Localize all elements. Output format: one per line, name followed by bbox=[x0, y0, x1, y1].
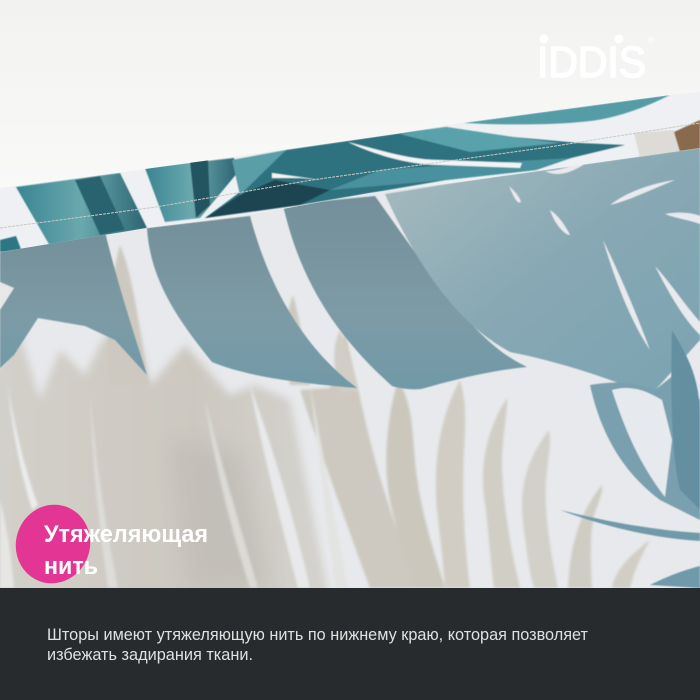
white leaf gaps bbox=[509, 160, 700, 350]
heading: Утяжеляющая нить: Утяжеляющая bbox=[44, 521, 208, 548]
blue palm leaves bbox=[0, 148, 700, 588]
heading: Утяжеляющая нить: нить bbox=[44, 553, 98, 580]
fabric panel bbox=[0, 130, 700, 600]
description text: избежать задирания ткани. bbox=[47, 646, 253, 664]
description text bbox=[47, 626, 588, 664]
logo: IDDIS: ® bbox=[648, 35, 655, 45]
wall background bbox=[0, 0, 700, 240]
heading: Утяжеляющая нить bbox=[44, 521, 208, 580]
pink blob bbox=[6, 495, 100, 593]
logo: IDDIS: IDDIS bbox=[537, 38, 646, 87]
description text: Шторы имеют утяжеляющую нить по нижнему краю, которая позволяет bbox=[47, 626, 588, 644]
beige palm fronds bbox=[0, 245, 650, 600]
hem with stitch bbox=[0, 92, 700, 252]
footer panel bbox=[0, 588, 700, 700]
